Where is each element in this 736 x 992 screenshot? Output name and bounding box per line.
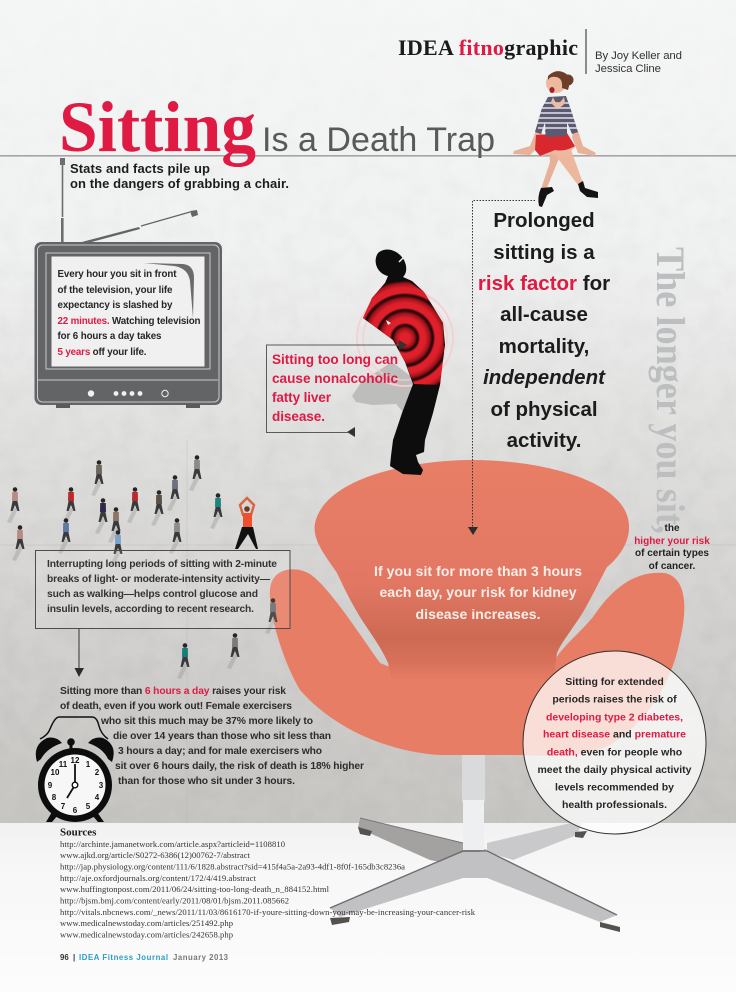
exercise statement: sit over 6 hours daily, the risk of death is 18% higher [115,761,364,772]
circle callout: diabetes and heart disease: levels recommended by [555,782,674,794]
main statement: risk factor: sitting is a [493,241,595,264]
page footer: IDEA Fitness Journal [79,953,168,962]
callout text: Sitting too long can [272,352,398,367]
circle callout: diabetes and heart disease [523,651,706,834]
cancer statement: of cancer. [649,561,696,572]
icon: alarm clock: 12 [71,756,80,765]
sources list: http://vitals.nbcnews.com/_news/2011/11/03/8616170-if-youre-sitting-down-you-may-be-increasing-your-cancer-risk [60,907,476,917]
icon: television with stat [34,242,222,408]
circle callout: diabetes and heart disease: heart disease and premature [543,728,686,740]
kidney statement: each day, your risk for kidney [380,584,577,600]
icon: alarm clock: 4 [95,793,100,802]
tv stat text: 22 minutes. Watching television [58,316,201,327]
masthead: IDEA fitnographic: IDEA fitnographic [398,35,578,60]
circle callout: diabetes and heart disease: health professionals. [562,799,667,811]
title: Is a Death Trap [262,121,495,159]
icon: alarm clock [36,717,114,822]
dotted connector arrow [468,200,535,535]
title [59,87,495,167]
icon: alarm clock: 5 [86,802,91,811]
tv stat text: Every hour you sit in front [58,269,177,280]
main statement: risk factor: independent [483,366,606,389]
exercise statement: of death, even if you work out! Female exercisers [60,701,292,712]
chair back [315,460,629,682]
chair seat and arms [270,569,684,756]
exercise statement: 3 hours a day; and for male exercisers who [118,746,322,757]
title: Sitting [59,87,256,167]
masthead: IDEA fitnographic: Jessica Cline [595,63,661,75]
callout text: cause nonalcoholic [272,371,398,386]
target rings [363,281,444,385]
icon: alarm clock: 7 [61,802,66,811]
main statement: risk factor: mortality, [499,335,589,358]
masthead: IDEA fitnographic: By Joy Keller and [595,50,682,62]
page footer: 96 [60,953,69,962]
arrowhead left [347,427,355,437]
orange stretching figure [235,498,258,549]
sources list [60,826,476,940]
tv stat text: 5 years off your life. [58,347,147,358]
exercise statement [60,686,364,787]
sources list: www.huffingtonpost.com/2011/06/24/sitting-too-long-death_n_884152.html [60,884,330,894]
arrow down to exercise text [74,629,84,677]
chair base [330,750,620,932]
icon: alarm clock: 10 [51,768,60,777]
callout text: disease. [272,409,325,424]
page footer: January 2013 [173,953,229,962]
icon: alarm clock: 3 [99,781,104,790]
cancer statement: higher your risk [634,536,710,547]
main statement: risk factor [478,209,610,452]
sources list: www.medicalnewstoday.com/articles/251492.php [60,918,233,928]
callout box: interrupting sitting: insulin levels, according to recent research. [47,604,254,615]
subtitle [70,161,289,191]
pink pulse rings [357,290,453,386]
main statement: risk factor: Prolonged [493,209,595,232]
background: white floor [0,823,736,992]
callout box: interrupting sitting: such as walking—helps control glucose and [47,589,258,600]
sources list: http://jap.physiology.org/content/111/6/1828.abstract?sid=415f4a5a-2a93-4df1-8f0f-165db3c8236a [60,862,405,872]
tv stat text [58,269,201,358]
icon: alarm clock: 2 [95,768,100,777]
exercise statement: Sitting more than 6 hours a day raises your risk [60,686,286,697]
sources list: www.medicalnewstoday.com/articles/242658.php [60,930,233,940]
tv stat text: expectancy is slashed by [58,300,173,311]
sources list: http://aje.oxfordjournals.org/content/172/4/419.abstract [60,873,257,883]
kidney statement [374,563,582,622]
callout text [272,352,398,424]
title rule [0,155,736,157]
masthead: IDEA fitnographic [398,29,682,75]
sources list: Sources [60,826,97,838]
main statement: risk factor: risk factor for [478,272,610,295]
circle callout: diabetes and heart disease: meet the daily physical activity [537,764,692,776]
tv stat text: of the television, your life [58,285,173,296]
subtitle: on the dangers of grabbing a chair. [70,176,289,191]
exercise statement: than for those who sit under 3 hours. [118,776,295,787]
main statement: risk factor: activity. [507,429,581,452]
circle callout: diabetes and heart disease: death, even for people who [547,746,682,758]
arrowhead right [399,340,407,350]
icon: alarm clock: 9 [48,781,53,790]
background: wall texture [191,556,192,557]
page footer: | [73,953,75,962]
callout text: fatty liver [272,390,332,405]
icon: woman sitting on the title rule [513,71,598,207]
sources list: www.ajkd.org/article/S0272-6386(12)00762-7/abstract [60,850,251,860]
icon: man silhouette with target on liver [352,249,453,475]
sources list: http://archinte.jamanetwork.com/article.aspx?articleid=1108810 [60,839,285,849]
kidney statement: If you sit for more than 3 hours [374,563,582,579]
vertical heading: The longer you sit, [648,247,693,534]
cancer statement [634,523,710,572]
circle callout: diabetes and heart disease: periods raises the risk of [552,694,677,706]
icon: alarm clock: 1 [86,760,91,769]
callout box: interrupting sitting [36,550,290,628]
callout box: interrupting sitting: Interrupting long periods of sitting with 2-minute [47,559,277,570]
walking people [7,455,278,679]
icon: alarm clock: 11 [59,760,68,769]
callout box: interrupting sitting: breaks of light- or moderate-intensity activity— [47,574,271,585]
circle callout: diabetes and heart disease: developing type 2 diabetes, [546,712,683,724]
main statement: risk factor: of physical [490,398,598,421]
sources list: http://bjsm.bmj.com/content/early/2011/08/01/bjsm.2011.085662 [60,896,289,906]
exercise statement: who sit this much may be 37% more likely to [100,716,313,727]
kidney statement: disease increases. [416,606,540,622]
cancer statement: of certain types [635,548,709,559]
circle callout: diabetes and heart disease: Sitting for extended [565,676,664,688]
subtitle: Stats and facts pile up [70,161,210,176]
tv stat text: for 6 hours a day takes [58,331,162,342]
cancer statement: the [664,523,680,534]
exercise statement: die over 14 years than those who sit less than [113,731,331,742]
page footer [60,953,229,962]
shadow of man [352,362,413,420]
man body [363,249,445,475]
callout frame: fatty liver [266,340,407,437]
icon: tv antennas [60,158,198,244]
main statement: risk factor: all-cause [500,303,588,326]
icon: alarm clock: 8 [52,793,57,802]
icon: alarm clock: 6 [73,806,78,815]
